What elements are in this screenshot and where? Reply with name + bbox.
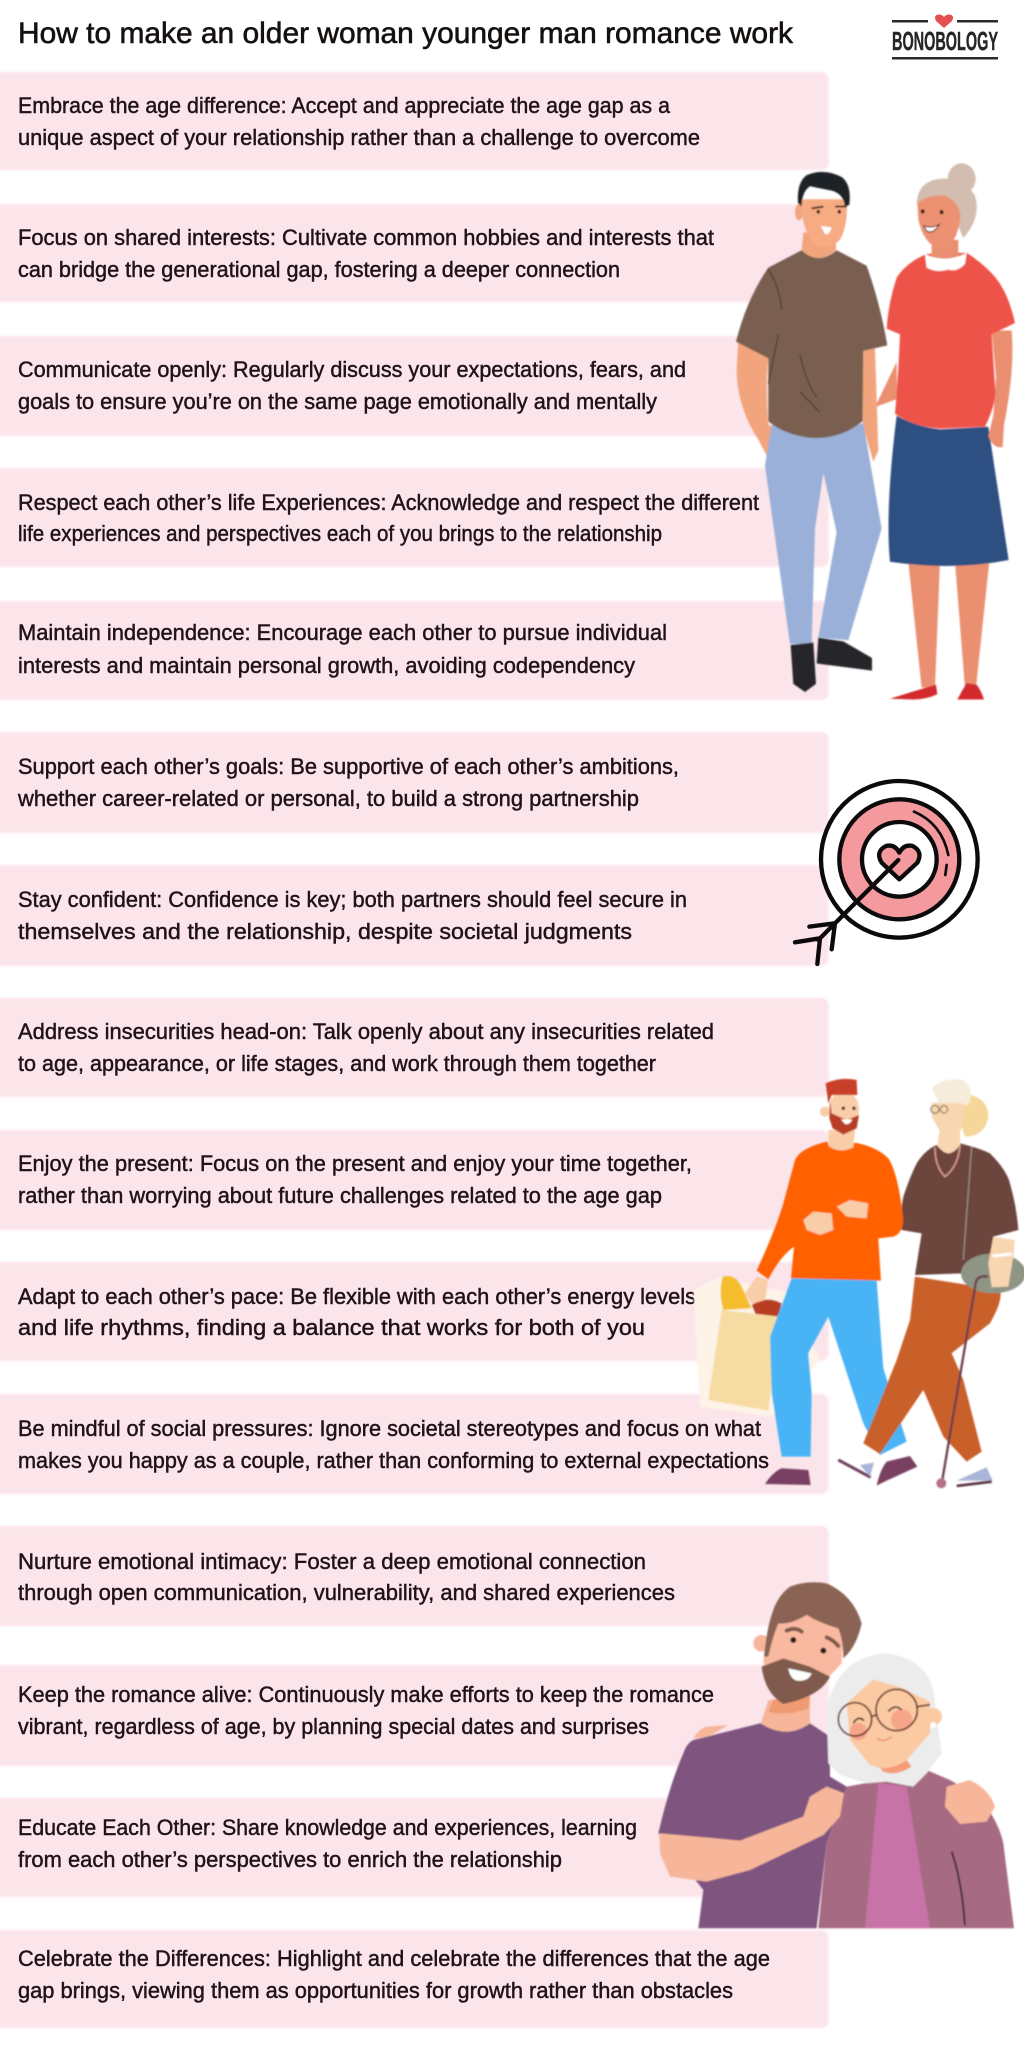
man's ear: [795, 204, 803, 220]
man's eyes and brows: [790, 1637, 796, 1643]
panel: keep romance alive: [0, 1665, 829, 1766]
clasped hands: [803, 1200, 868, 1235]
woman's hair: [917, 179, 977, 238]
arrow: [795, 860, 898, 964]
purse: [961, 1253, 1024, 1293]
man's arms: [737, 340, 878, 465]
panel: social pressures: makes you happy as a couple, rather than conforming to external expectations: [18, 1448, 769, 1473]
woman's feet: [957, 1467, 993, 1481]
shirt folds: [768, 270, 819, 412]
panel: educate each other: Educate Each Other: Share knowledge and experiences, learning: [18, 1815, 637, 1840]
panel: adapt to pace: Adapt to each other’s pace: Be flexible with each other’s energy levels: [18, 1284, 696, 1309]
panel: focus on shared interests: Focus on shared interests: Cultivate common hobbies and interests that: [18, 225, 714, 250]
panel: educate each other: [0, 1798, 829, 1897]
man's neck: [802, 232, 836, 258]
panel: adapt to pace: and life rhythms, finding a balance that works for both of you: [18, 1315, 645, 1340]
man's t-shirt: [736, 250, 887, 438]
man's face: [829, 1091, 859, 1129]
panel: enjoy the present: [0, 1130, 829, 1230]
bag halo: [693, 1277, 820, 1417]
bag: [708, 1310, 780, 1411]
man's hand at bag: [745, 1277, 768, 1304]
panel: address insecurities: [0, 998, 829, 1097]
woman's neck: [937, 1123, 960, 1153]
man's ear: [753, 1635, 770, 1652]
woman's hair bun: [948, 163, 976, 194]
woman's hair curls: [960, 1093, 988, 1137]
illustration: young man and older woman standing: [736, 163, 1015, 699]
man's ear: [820, 1107, 830, 1117]
man's face: [801, 199, 847, 247]
panel: embrace the age difference: unique aspect of your relationship rather than a challenge to overcome: [18, 125, 700, 150]
panel: educate each other: from each other’s perspectives to enrich the relationship: [18, 1847, 562, 1872]
woman's neck: [932, 240, 958, 263]
woman's arms: [875, 331, 1012, 447]
woman's glasses: [931, 1105, 939, 1113]
logo: Bonobology: [892, 14, 998, 60]
man's hand on near shoulder: [693, 1725, 728, 1738]
man's shoes: [791, 638, 872, 692]
panel: respect life experiences: life experiences and perspectives each of you brings to the relationship: [18, 521, 662, 546]
man's t-shirt: [658, 1723, 847, 1928]
bread: [721, 1276, 752, 1310]
panel: support goals: whether career-related or personal, to build a strong partnership: [17, 786, 639, 811]
panel: keep romance alive: Keep the romance alive: Continuously make efforts to keep the romance: [18, 1682, 714, 1707]
man's hair: [826, 1079, 857, 1103]
woman's ear: [925, 1708, 942, 1725]
panel: communicate openly: [0, 336, 829, 436]
panel: celebrate the differences: gap brings, viewing them as opportunities for growth rather than obstacles: [18, 1978, 733, 2003]
panel: social pressures: [0, 1394, 829, 1494]
necklace: [935, 1145, 960, 1177]
panel: support goals: Support each other’s goals: Be supportive of each other’s ambitions,: [18, 754, 679, 779]
man's hand on far shoulder: [945, 1780, 995, 1824]
panel: communicate openly: Communicate openly: Regularly discuss your expectations, fears, and: [18, 357, 686, 382]
woman's pants: [863, 1277, 1001, 1462]
panel: address insecurities: Address insecurities head-on: Talk openly about any insecurities related: [18, 1019, 714, 1044]
man's forearm and hand: [659, 1787, 844, 1882]
man's features: [812, 207, 847, 208]
bag strap: [963, 1147, 972, 1260]
man's neck: [761, 1695, 810, 1732]
panel: stay confident: themselves and the relationship, despite societal judgments: [18, 919, 632, 944]
panel: adapt to pace: [0, 1262, 829, 1361]
cardigan seam: [952, 1852, 965, 1925]
woman's top: [887, 253, 1015, 429]
panel: emotional intimacy: through open communication, vulnerability, and shared experiences: [18, 1580, 675, 1605]
woman's face: [917, 195, 961, 250]
panel: stay confident: Stay confident: Confidence is key; both partners should feel secure in: [18, 887, 687, 912]
heart: [879, 846, 919, 879]
man's neck: [828, 1130, 855, 1150]
woman's face: [932, 1103, 964, 1135]
panel: maintain independence: Maintain independence: Encourage each other to pursue individual: [18, 620, 667, 645]
icon: target with heart and arrow: [795, 781, 978, 964]
woman's collar: [925, 253, 967, 271]
woman's blouse: [865, 1783, 930, 1928]
woman's features: [921, 209, 925, 214]
woman's hair: [827, 1653, 942, 1787]
woman's legs: [908, 562, 989, 688]
illustration: man with bag and older woman with cane: [693, 1079, 1024, 1488]
woman's sweater: [901, 1143, 1018, 1275]
woman's face: [847, 1679, 930, 1768]
panel: focus on shared interests: can bridge the generational gap, fostering a deeper connection: [18, 257, 620, 282]
woman's cardigan: [818, 1770, 1014, 1928]
title: How to make an older woman younger man romance work: [18, 17, 794, 50]
panel: enjoy the present: rather than worrying about future challenges related to the age gap: [18, 1183, 662, 1208]
man's beard: [829, 1100, 859, 1135]
panel: celebrate the differences: Celebrate the Differences: Highlight and celebrate the differences that the age: [18, 1946, 770, 1971]
woman's shoes: [890, 683, 984, 699]
man's beard: [762, 1658, 830, 1704]
man's face: [763, 1615, 843, 1693]
panel: respect life experiences: [0, 468, 829, 567]
woman's forearm and hand: [988, 1237, 1015, 1287]
panel: embrace the age difference: Embrace the age difference: Accept and appreciate the age gap as a: [18, 93, 671, 118]
panel: respect life experiences: Respect each other’s life Experiences: Acknowledge and respect the different: [18, 490, 759, 515]
panel: maintain independence: [0, 601, 829, 700]
cane: [942, 1276, 988, 1484]
panel: celebrate the differences: [0, 1930, 829, 2028]
panel: emotional intimacy: Nurture emotional intimacy: Foster a deep emotional connection: [18, 1549, 646, 1574]
man's shoes: [765, 1468, 811, 1485]
panel: stay confident: [0, 865, 829, 966]
woman's skirt: [888, 416, 1009, 566]
panel: communicate openly: goals to ensure you’re on the same page emotionally and mentally: [18, 389, 657, 414]
panel: enjoy the present: Enjoy the present: Focus on the present and enjoy your time together,: [18, 1151, 692, 1176]
panel: keep romance alive: vibrant, regardless of age, by planning special dates and surprises: [18, 1714, 649, 1739]
panel: social pressures: Be mindful of social pressures: Ignore societal stereotypes and focus on what: [18, 1416, 761, 1441]
woman's cheeks: [850, 1723, 867, 1740]
illustration: bearded man hugging older woman: [658, 1582, 1014, 1928]
man's sweater: [757, 1142, 903, 1281]
woman's glasses: [838, 1689, 930, 1740]
highlight arcs: [914, 812, 948, 875]
tomato: [752, 1300, 782, 1317]
man's pants: [770, 1278, 907, 1457]
panel: embrace the age difference: [0, 72, 829, 170]
panel: address insecurities: to age, appearance, or life stages, and work through them together: [18, 1051, 656, 1076]
man's smile: [788, 1668, 812, 1681]
panel: emotional intimacy: [0, 1526, 829, 1626]
panel: maintain independence: interests and maintain personal growth, avoiding codependency: [18, 653, 635, 678]
panel: support goals: [0, 732, 829, 833]
man's hair: [798, 172, 850, 207]
man's jeans: [765, 423, 882, 644]
man's hair: [764, 1582, 862, 1658]
panel: focus on shared interests: [0, 204, 829, 302]
